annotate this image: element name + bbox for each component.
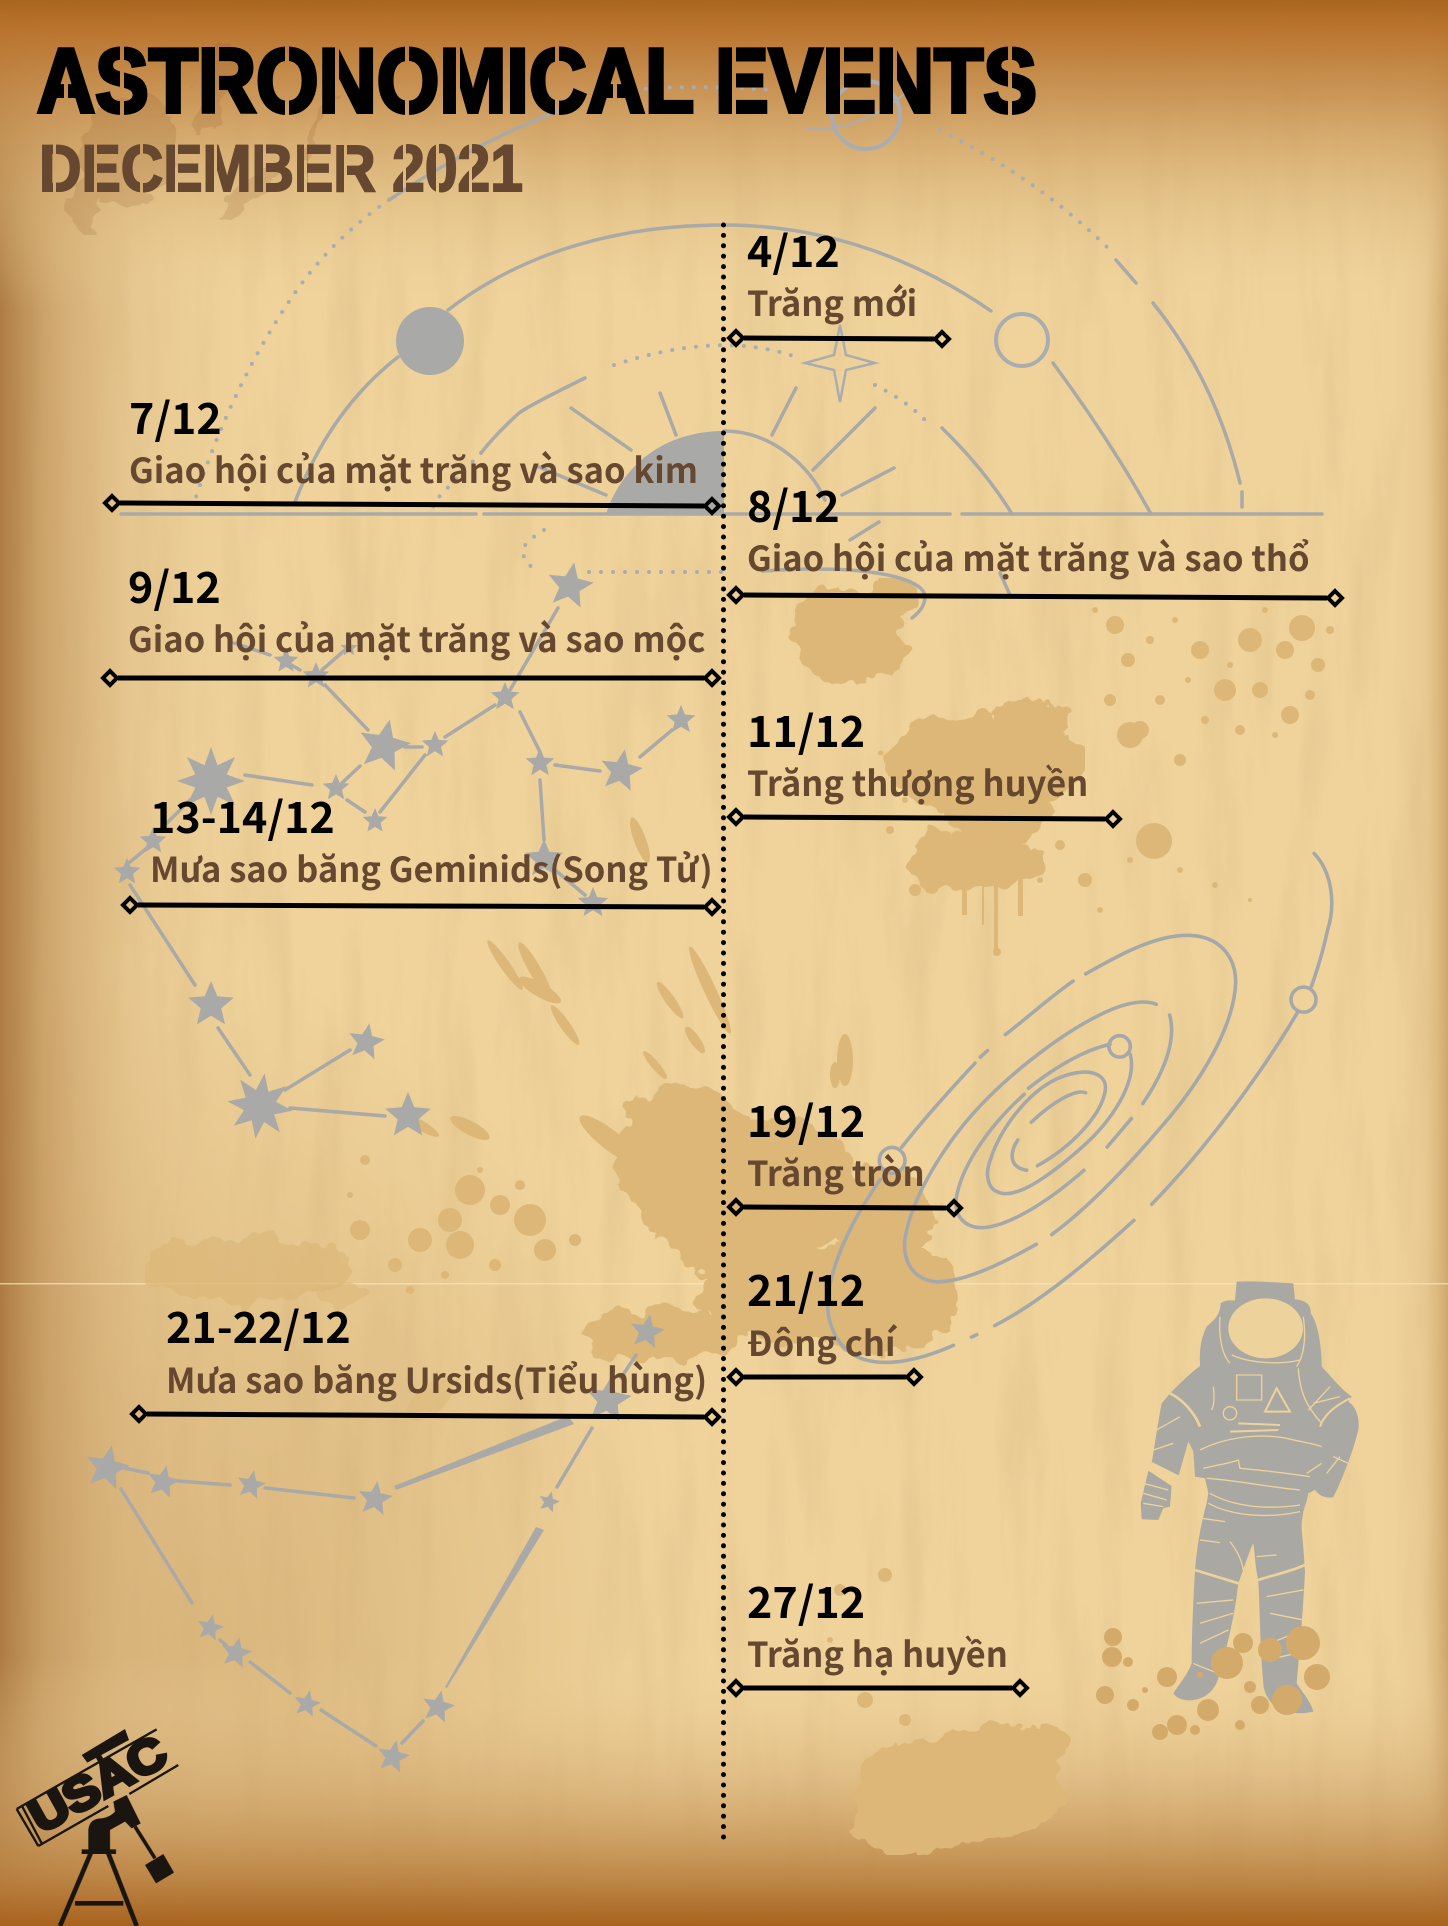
subtitle: DECEMBER 2021 — [39, 131, 523, 205]
event: 11/12: Trăng thượng huyền — [747, 756, 1088, 806]
lower dotted orbit — [523, 530, 544, 568]
event: 13-14/12: 13-14/12 — [150, 784, 335, 846]
telescope tube outline — [17, 1729, 178, 1846]
event: 21/12: 21/12 — [747, 1257, 865, 1319]
half sun — [606, 431, 724, 514]
astronaut — [1141, 1281, 1359, 1713]
event: 27/12: Trăng hạ huyền — [747, 1627, 1008, 1677]
event: 19/12: 19/12 — [747, 1088, 865, 1150]
ring planet — [996, 314, 1048, 366]
event: 11/12 — [729, 698, 1120, 826]
event: 9/12 — [103, 554, 719, 685]
event: 13-14/12: Mưa sao băng Geminids(Song Tử) — [150, 842, 713, 892]
event: 13-14/12 — [123, 784, 719, 914]
paint blots over astronaut — [1096, 1626, 1330, 1740]
event: 21-22/12 — [132, 1294, 719, 1424]
sun disc — [396, 307, 464, 375]
timeline axis — [721, 225, 726, 1840]
logo: USAC telescope — [17, 1725, 178, 1926]
event: 8/12: 8/12 — [747, 473, 840, 535]
paint splatter: upper left stain — [64, 38, 340, 235]
event: 9/12: Giao hội của mặt trăng và sao mộc — [128, 612, 705, 662]
horizon line — [121, 512, 1322, 516]
event: 19/12 — [729, 1088, 961, 1215]
constellation: Ursa Minor — [82, 1311, 667, 1774]
event: 21/12: Đông chí — [747, 1316, 898, 1366]
far dotted arc — [195, 200, 389, 500]
event: 21-22/12: Mưa sao băng Ursids(Tiểu hùng) — [166, 1353, 707, 1403]
outer arc — [295, 225, 1151, 514]
event: 7/12 — [105, 385, 719, 513]
event: 7/12: 7/12 — [129, 385, 222, 447]
event: 21-22/12: 21-22/12 — [166, 1294, 351, 1356]
event: 27/12: 27/12 — [747, 1569, 865, 1631]
celestial sphere diagram — [121, 81, 1322, 618]
telescope finder — [82, 1729, 129, 1763]
event: 27/12 — [729, 1569, 1027, 1695]
tripod — [60, 1852, 137, 1926]
event: 8/12 — [729, 473, 1342, 605]
event: 21/12 — [729, 1257, 921, 1384]
four point star — [805, 325, 875, 402]
event: 4/12 — [729, 218, 949, 346]
event: 4/12: Trăng mới — [747, 276, 917, 326]
paint splatters — [145, 578, 1085, 1855]
event: 19/12: Trăng tròn — [747, 1146, 925, 1196]
event: 7/12: Giao hội của mặt trăng và sao kim — [129, 443, 698, 493]
event: 9/12: 9/12 — [128, 554, 221, 616]
constellation: Gemini — [114, 558, 695, 1143]
logo wordmark: USAC — [20, 1725, 175, 1843]
small planet ring — [805, 81, 915, 149]
paint specks — [347, 607, 1334, 1726]
solar system orbits — [828, 854, 1332, 1362]
event: 8/12: Giao hội của mặt trăng và sao thổ — [747, 531, 1310, 581]
event: 11/12: 11/12 — [747, 698, 865, 760]
telescope mount — [88, 1795, 141, 1852]
sun rays — [539, 388, 894, 495]
title: ASTRONOMICAL EVENTS — [37, 31, 1037, 132]
inner dotted arc — [614, 345, 796, 365]
event: 4/12: 4/12 — [747, 218, 840, 280]
